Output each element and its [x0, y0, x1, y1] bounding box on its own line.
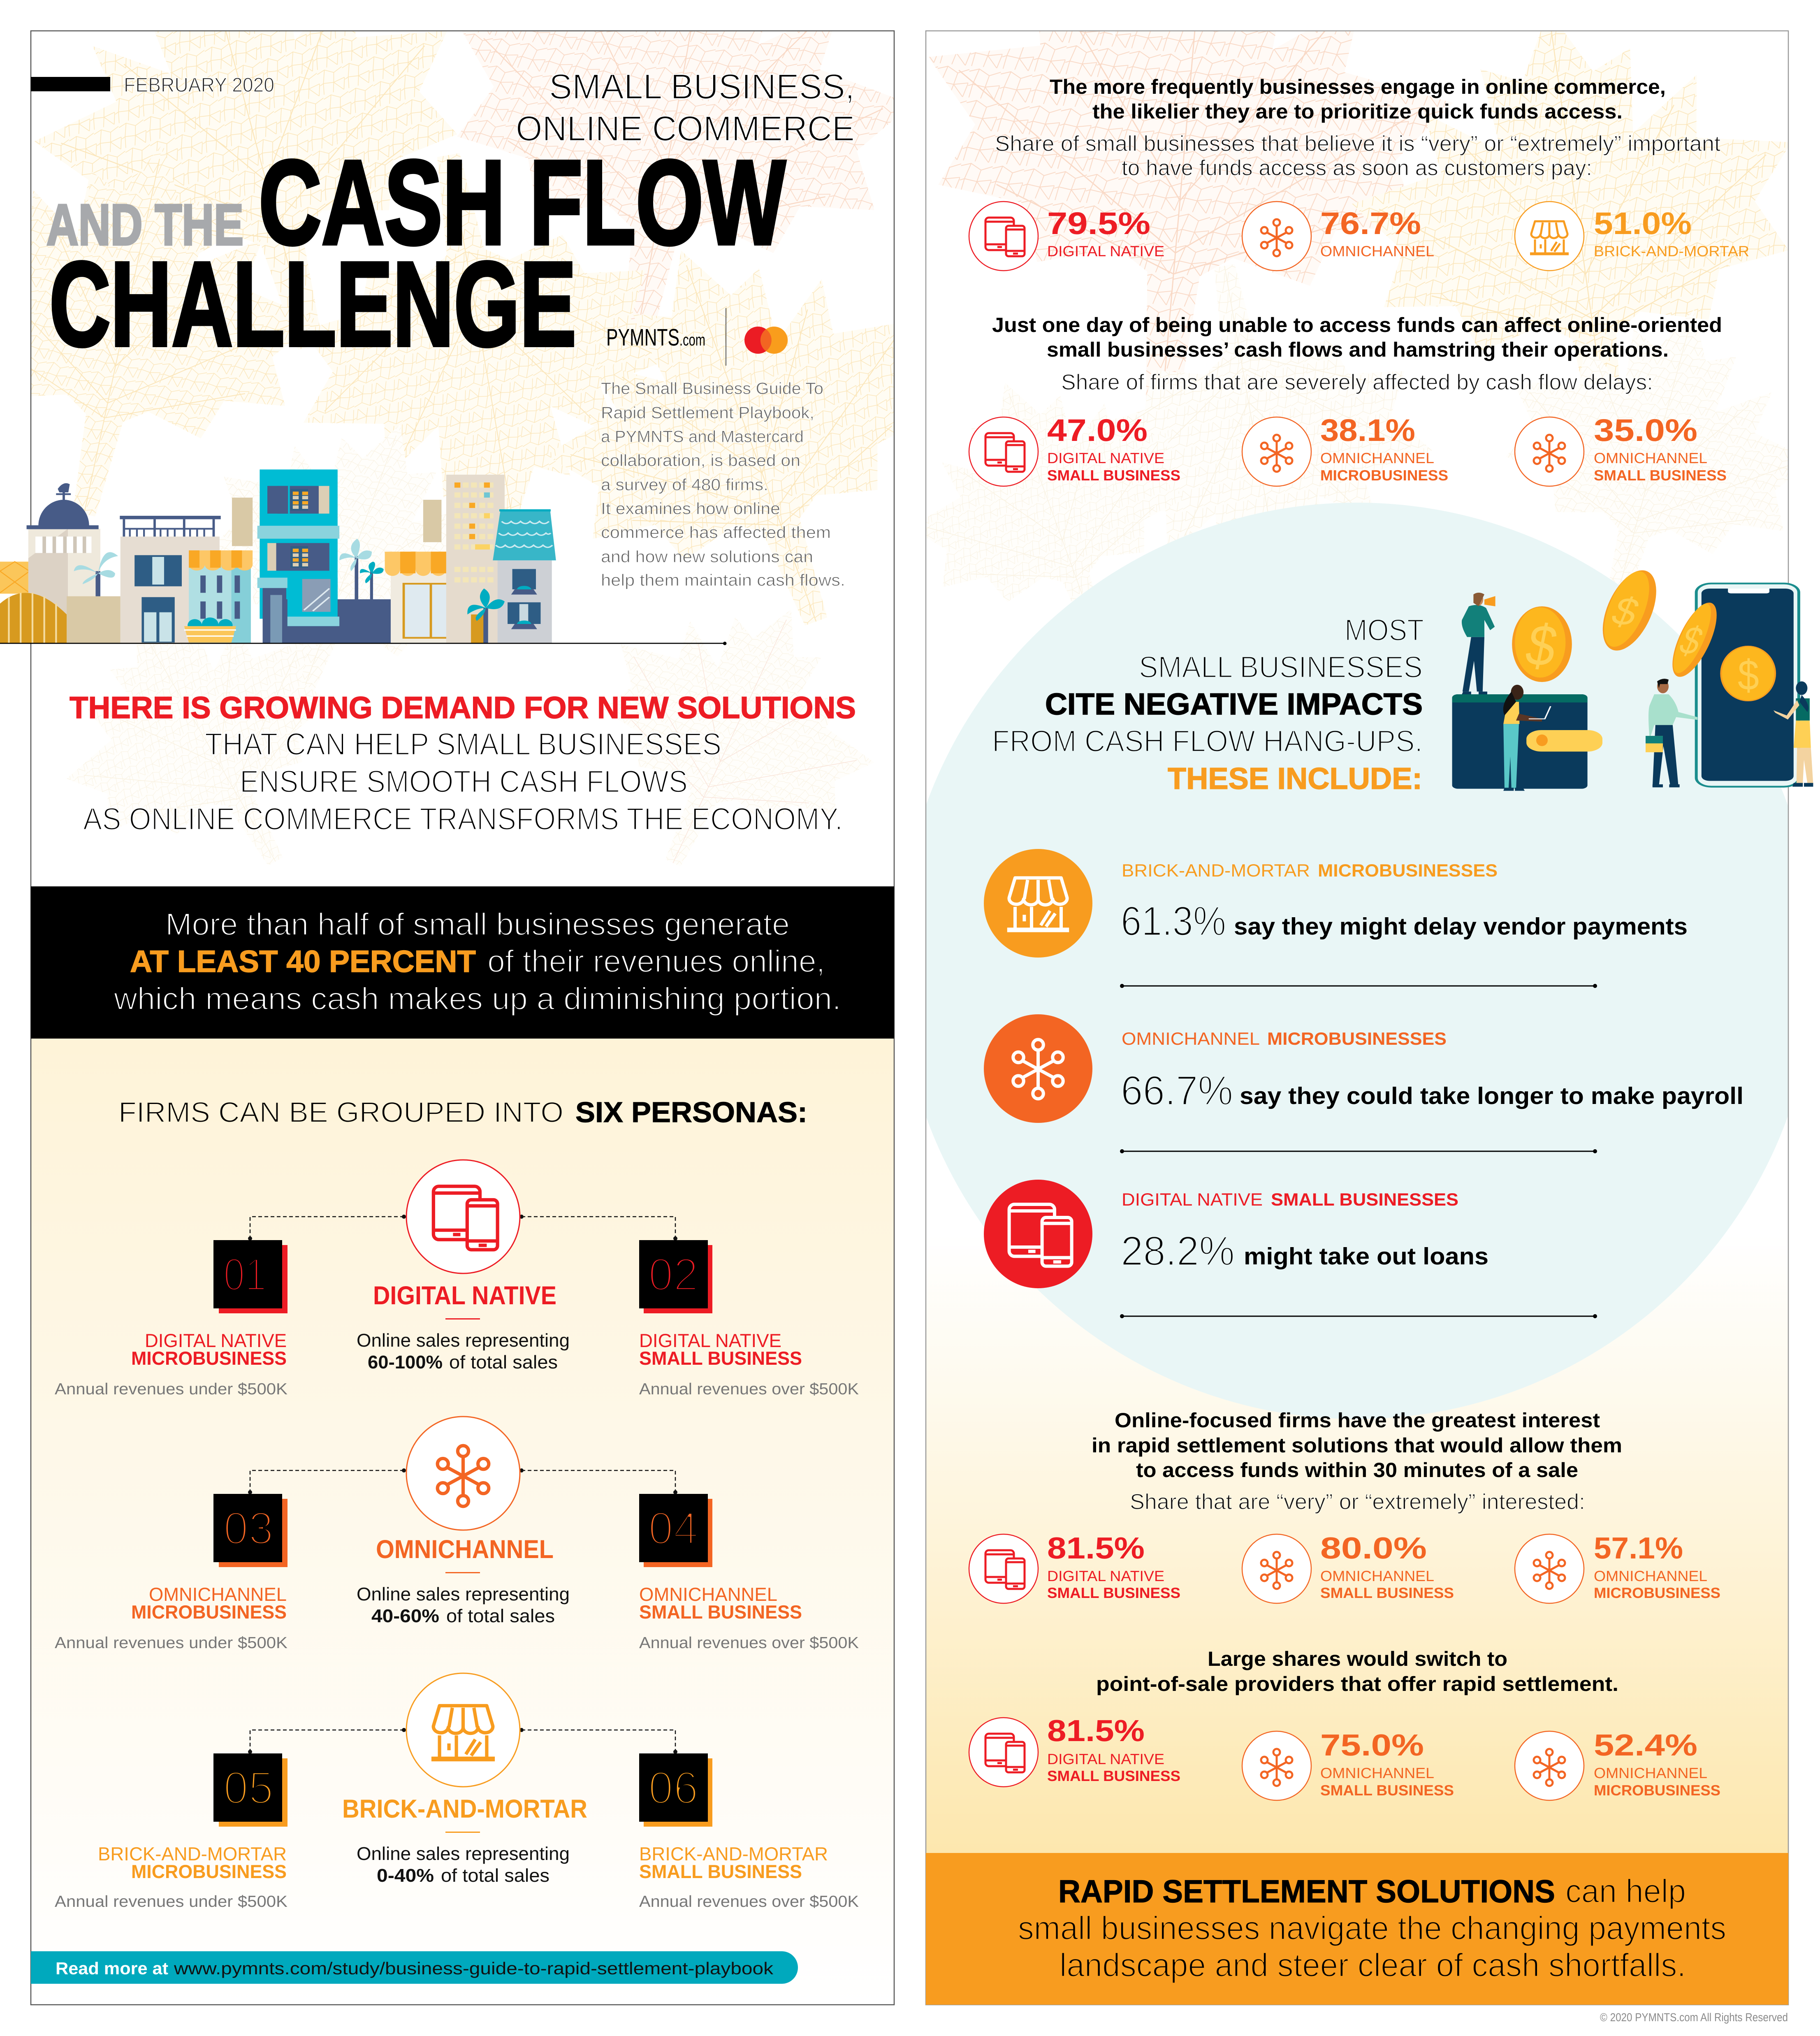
copyright: © 2020 PYMNTS.com All Rights Reserved	[1600, 2011, 1788, 2024]
impact row: digital native	[984, 1180, 1597, 1318]
stat: 35.0%	[1515, 413, 1727, 486]
impact row: brick-and-mortar: say they might delay vendor payments	[1234, 913, 1688, 940]
phone: $	[1738, 652, 1759, 699]
icon: network on orange circle	[984, 1014, 1092, 1123]
coins: $	[1521, 612, 1563, 679]
stat: 52.4% switching	[1515, 1728, 1720, 1800]
heading: negative impacts	[992, 613, 1424, 795]
date: FEBRUARY 2020	[124, 74, 274, 96]
icon: network	[406, 1417, 520, 1530]
coins	[1512, 568, 1667, 682]
band: at least 40 percent: AT LEAST 40 PERCENT	[130, 944, 476, 979]
woman right	[1774, 681, 1813, 787]
stat: 47.0%: DIGITAL NATIVE	[1047, 450, 1164, 466]
man with briefcase	[1646, 679, 1697, 787]
panel outline: right	[926, 31, 1788, 2005]
description: of total sales	[446, 1605, 555, 1626]
heading: negative impacts: MOST	[1345, 613, 1424, 647]
description: Online sales representing	[357, 1843, 570, 1864]
label 05: BRICK-AND-MORTAR	[98, 1843, 287, 1864]
badge 01	[213, 1240, 287, 1313]
label 02: Annual revenues over $500K	[639, 1380, 859, 1398]
intro text: Rapid Settlement Playbook,	[601, 404, 814, 422]
title: CASH FLOW	[259, 135, 786, 269]
stat: 57.1%	[1515, 1531, 1720, 1603]
description: 60-100%	[368, 1352, 443, 1373]
stat: 35.0%: OMNICHANNEL	[1594, 450, 1707, 466]
heading: six personas: SIX PERSONAS:	[575, 1096, 807, 1128]
headline: growing demand: AS ONLINE COMMERCE TRANSFORMS THE ECONOMY.	[83, 802, 843, 837]
label 01: DIGITAL NATIVE	[145, 1330, 287, 1351]
label 01: Annual revenues under $500K	[55, 1380, 287, 1398]
read more pill: Read more at	[56, 1959, 168, 1978]
illustration: wallet, coins, phone and people	[1452, 568, 1813, 791]
band: rapid settlement solutions: can help	[1565, 1873, 1686, 1909]
woman with laptop	[1503, 685, 1551, 791]
impact row: digital native: might take out loans	[1244, 1243, 1488, 1270]
stat: 51.0% brick-and-mortar: 51.0%	[1594, 206, 1692, 241]
badge 05: 05	[223, 1762, 274, 1813]
title	[46, 67, 855, 371]
intro text: It examines how online	[601, 500, 780, 518]
band: at least 40 percent: of their revenues online,	[487, 944, 825, 979]
stat: 47.0%: SMALL BUSINESS	[1047, 467, 1180, 484]
date bar	[31, 77, 110, 91]
panel: right background	[926, 31, 1788, 1853]
label 03: Annual revenues under $500K	[55, 1634, 287, 1652]
heading: negative impacts: SMALL BUSINESSES	[1139, 650, 1423, 684]
label 06: Annual revenues over $500K	[639, 1893, 859, 1911]
badge 02	[639, 1240, 712, 1313]
text block: one day delay	[992, 313, 1722, 394]
stat: 38.1%: MICROBUSINESS	[1320, 467, 1448, 484]
impact row: digital native: SMALL BUSINESSES	[1271, 1190, 1458, 1210]
intro text: The Small Business Guide To	[601, 380, 823, 398]
impact row: digital native: 28.2%	[1121, 1228, 1235, 1274]
stat: 79.5% digital native	[969, 202, 1164, 271]
text block: rapid settlement interest: to access funds within 30 minutes of a sale	[1136, 1459, 1578, 1482]
icon: storefront on amber circle	[984, 849, 1092, 958]
label 05: MICROBUSINESS	[131, 1861, 287, 1882]
logos: PYMNTS and Mastercard: PYMNTS	[606, 324, 679, 351]
band: rapid settlement solutions: RAPID SETTLEMENT SOLUTIONS	[1058, 1873, 1555, 1909]
label 03	[55, 1584, 287, 1652]
band: at least 40 percent: which means cash makes up a diminishing portion.	[114, 981, 841, 1016]
badge 04: 04	[648, 1503, 698, 1554]
stat: 38.1%	[1242, 413, 1448, 486]
label 02: DIGITAL NATIVE	[639, 1330, 781, 1351]
impact row: omnichannel: MICROBUSINESSES	[1267, 1029, 1447, 1049]
intro text	[601, 380, 845, 589]
headline: growing demand: THERE IS GROWING DEMAND FOR NEW SOLUTIONS	[70, 690, 856, 725]
description	[357, 1843, 570, 1886]
stat: 81.5% switching: DIGITAL NATIVE	[1047, 1751, 1164, 1767]
badge 03: 03	[223, 1503, 274, 1554]
label 04: OMNICHANNEL	[639, 1584, 777, 1605]
stat: 76.7% omnichannel: 76.7%	[1320, 206, 1421, 241]
text block: point-of-sale switching	[1096, 1647, 1618, 1695]
description	[357, 1584, 570, 1626]
band: rapid settlement solutions: small businesses navigate the changing payments	[1018, 1910, 1726, 1946]
badge 04	[639, 1494, 712, 1567]
stat: 81.5% switching: 81.5%	[1047, 1714, 1145, 1748]
headline: growing demand: THAT CAN HELP SMALL BUSINESSES	[205, 727, 721, 762]
label 04	[639, 1584, 859, 1652]
label 05	[55, 1843, 287, 1911]
title: ONLINE COMMERCE	[516, 109, 855, 148]
heading: negative impacts: FROM CASH FLOW HANG-UPS.	[992, 724, 1423, 758]
stat: 79.5% digital native: 79.5%	[1047, 206, 1150, 241]
title: AND THE	[46, 192, 243, 257]
impact row: omnichannel: OMNICHANNEL	[1122, 1029, 1260, 1049]
stat: 57.1%: OMNICHANNEL	[1594, 1568, 1707, 1584]
stat: 35.0%: SMALL BUSINESS	[1594, 467, 1727, 484]
stat: 75.0% switching: 75.0%	[1320, 1728, 1424, 1762]
impact row: omnichannel: say they could take longer to make payroll	[1240, 1083, 1743, 1109]
description: of total sales	[449, 1352, 558, 1373]
impact row: digital native: DIGITAL NATIVE	[1122, 1190, 1263, 1210]
label 02: SMALL BUSINESS	[639, 1347, 802, 1369]
label 06	[639, 1843, 859, 1911]
stat: 38.1%: OMNICHANNEL	[1320, 450, 1434, 466]
band: at least 40 percent: More than half of small businesses generate	[165, 907, 790, 942]
impact row: brick-and-mortar	[984, 849, 1688, 988]
heading: six personas	[118, 1096, 807, 1128]
text block: one day delay: Share of firms that are severely affected by cash flow delays:	[1061, 370, 1653, 394]
label 04: SMALL BUSINESS	[639, 1601, 802, 1623]
impact row: omnichannel	[984, 1014, 1743, 1153]
headline: growing demand: ENSURE SMOOTH CASH FLOWS	[240, 764, 688, 799]
text block: funds access: the likelier they are to prioritize quick funds access.	[1092, 100, 1623, 123]
description: Online sales representing	[357, 1330, 570, 1351]
stat: 51.0% brick-and-mortar: BRICK-AND-MORTAR	[1594, 243, 1749, 260]
intro text: and how new solutions can	[601, 548, 813, 566]
text block: rapid settlement interest	[1092, 1409, 1622, 1514]
badge 06: 06	[648, 1762, 698, 1813]
stat: 52.4% switching: 52.4%	[1594, 1728, 1697, 1762]
stat: 81.5%: 81.5%	[1047, 1531, 1145, 1565]
stat: 81.5% switching	[969, 1714, 1180, 1787]
text block: one day delay: small businesses’ cash flows and hamstring their operations.	[1047, 338, 1669, 361]
badge 05	[213, 1753, 287, 1827]
description: of total sales	[441, 1865, 549, 1886]
impact row: brick-and-mortar: MICROBUSINESSES	[1318, 861, 1498, 881]
intro text: a survey of 480 firms.	[601, 476, 768, 494]
text block: funds access: The more frequently businesses engage in online commerce,	[1050, 75, 1666, 98]
stat: 38.1%: 38.1%	[1320, 413, 1415, 448]
read more pill	[31, 1951, 798, 1984]
stat: 80.0%: 80.0%	[1320, 1531, 1427, 1565]
label 04: Annual revenues over $500K	[639, 1634, 859, 1652]
intro text: collaboration, is based on	[601, 452, 800, 470]
band: rapid settlement solutions	[926, 1853, 1788, 2005]
description: 0-40%	[377, 1865, 434, 1886]
stat: 52.4% switching: MICROBUSINESS	[1594, 1782, 1720, 1799]
intro text: commerce has affected them	[601, 524, 831, 542]
title: CHALLENGE	[49, 237, 576, 371]
badge 03	[213, 1494, 287, 1567]
label 06: SMALL BUSINESS	[639, 1861, 802, 1882]
stat: 47.0%	[969, 413, 1180, 486]
label 03: OMNICHANNEL	[149, 1584, 287, 1605]
persona group: digital native	[55, 1160, 859, 1398]
coins: $	[1605, 589, 1646, 635]
stat: 80.0%	[1242, 1531, 1454, 1603]
text block: funds access: Share of small businesses that believe it is “very” or “extremely” important	[995, 132, 1720, 156]
persona title: OMNICHANNEL	[376, 1535, 554, 1564]
label 05: Annual revenues under $500K	[55, 1893, 287, 1911]
text block: rapid settlement interest: Share that are “very” or “extremely” interested:	[1130, 1490, 1585, 1514]
logos: PYMNTS and Mastercard: .com	[679, 331, 705, 349]
badge 01: 01	[223, 1249, 267, 1300]
persona group: omnichannel	[55, 1417, 859, 1652]
heading: negative impacts: THESE INCLUDE:	[1168, 761, 1422, 795]
label 06: BRICK-AND-MORTAR	[639, 1843, 828, 1864]
phone	[1663, 584, 1799, 787]
text block: one day delay: Just one day of being unable to access funds can affect online-oriented	[992, 313, 1722, 336]
description	[357, 1330, 570, 1373]
stat: 81.5% switching: SMALL BUSINESS	[1047, 1767, 1180, 1784]
stat: 57.1%: 57.1%	[1594, 1531, 1683, 1565]
icon: devices	[406, 1160, 520, 1273]
band: at least 40 percent	[31, 886, 894, 1039]
stat: 35.0%: 35.0%	[1594, 413, 1697, 448]
title: SMALL BUSINESS,	[549, 67, 855, 107]
persona group: brick-and-mortar	[55, 1673, 859, 1911]
persona title: BRICK-AND-MORTAR	[342, 1795, 587, 1823]
intro text: help them maintain cash flows.	[601, 571, 845, 589]
intro text: a PYMNTS and Mastercard	[601, 428, 804, 446]
text block: point-of-sale switching: point-of-sale providers that offer rapid settlement.	[1096, 1672, 1618, 1695]
label 01	[55, 1330, 287, 1398]
wallet	[1452, 694, 1602, 789]
panel: left background	[31, 31, 894, 1806]
illustration: cityscape	[0, 469, 726, 645]
persona title: DIGITAL NATIVE	[373, 1281, 556, 1310]
stat: 57.1%: MICROBUSINESS	[1594, 1584, 1720, 1601]
icon: devices on red circle	[984, 1180, 1092, 1288]
heading: six personas: FIRMS CAN BE GROUPED INTO	[118, 1096, 563, 1128]
impact row: brick-and-mortar: BRICK-AND-MORTAR	[1122, 861, 1310, 881]
text block: point-of-sale switching: Large shares would switch to	[1208, 1647, 1507, 1670]
stat: 79.5% digital native: DIGITAL NATIVE	[1047, 243, 1164, 260]
impact row: omnichannel: 66.7%	[1121, 1068, 1233, 1114]
phone: $	[1674, 618, 1709, 663]
person with megaphone	[1462, 593, 1495, 694]
text block: rapid settlement interest: Online-focused firms have the greatest interest	[1115, 1409, 1600, 1432]
stat: 75.0% switching: OMNICHANNEL	[1320, 1765, 1434, 1781]
text block: rapid settlement interest: in rapid settlement solutions that would allow them	[1092, 1434, 1622, 1457]
heading: negative impacts: CITE NEGATIVE IMPACTS	[1045, 687, 1423, 721]
band: rapid settlement solutions: landscape and steer clear of cash shortfalls.	[1060, 1947, 1686, 1983]
read more pill: www.pymnts.com/study/business-guide-to-rapid-settlement-playbook	[174, 1959, 774, 1978]
label 03: MICROBUSINESS	[131, 1601, 287, 1623]
panel outline: left	[31, 31, 894, 2005]
stat: 81.5%: DIGITAL NATIVE	[1047, 1568, 1164, 1584]
headline: growing demand	[70, 690, 856, 837]
description: 40-60%	[371, 1605, 439, 1626]
label 02	[639, 1330, 859, 1398]
logos: PYMNTS and Mastercard	[606, 308, 788, 366]
stat: 47.0%: 47.0%	[1047, 413, 1148, 448]
stat: 76.7% omnichannel: OMNICHANNEL	[1320, 243, 1434, 260]
description: Online sales representing	[357, 1584, 570, 1605]
stat: 75.0% switching	[1242, 1728, 1454, 1800]
impact row: brick-and-mortar: 61.3%	[1121, 898, 1226, 944]
badge 02: 02	[648, 1249, 698, 1300]
stat: 81.5%	[969, 1531, 1180, 1603]
stat: 80.0%: SMALL BUSINESS	[1320, 1584, 1454, 1601]
label 01: MICROBUSINESS	[131, 1347, 287, 1369]
icon: storefront	[406, 1673, 520, 1787]
stat: 75.0% switching: SMALL BUSINESS	[1320, 1782, 1454, 1799]
text block: funds access: to have funds access as soon as customers pay:	[1122, 156, 1592, 180]
stat: 51.0% brick-and-mortar	[1515, 202, 1749, 271]
stat: 81.5%: SMALL BUSINESS	[1047, 1584, 1180, 1601]
text block: funds access	[995, 75, 1720, 180]
stat: 76.7% omnichannel	[1242, 202, 1434, 271]
stat: 52.4% switching: OMNICHANNEL	[1594, 1765, 1707, 1781]
stat: 80.0%: OMNICHANNEL	[1320, 1568, 1434, 1584]
badge 06	[639, 1753, 712, 1827]
